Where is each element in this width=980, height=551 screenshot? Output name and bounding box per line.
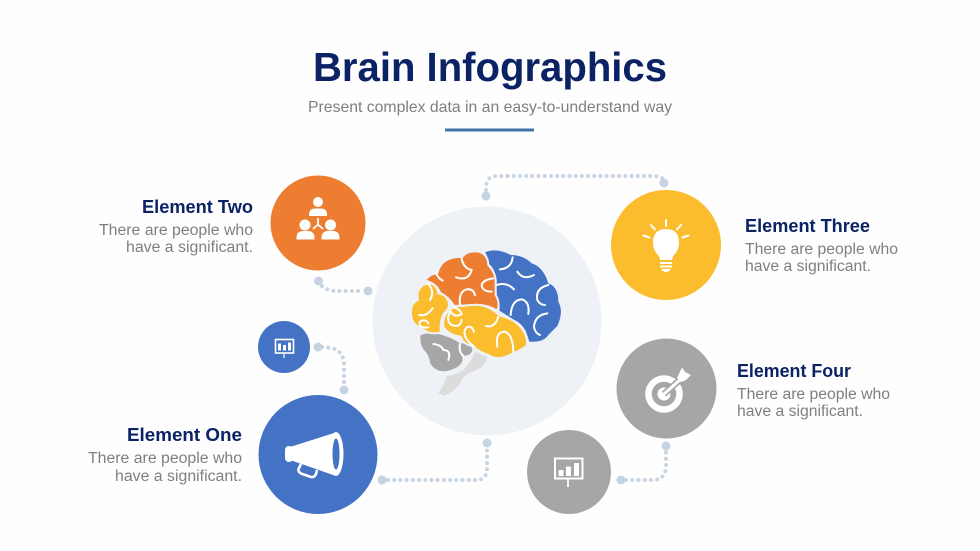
Element One text: There are people who <box>88 450 242 467</box>
Element Two text: There are people who <box>99 222 253 239</box>
Element Four text: have a significant. <box>737 403 863 420</box>
Element Two text <box>99 196 253 256</box>
icon: megaphone <box>285 432 344 477</box>
Element Four circle <box>616 338 716 438</box>
small blue circle <box>258 321 310 373</box>
connector: top centre to Element Three <box>482 176 668 200</box>
icon: target with dart <box>648 368 691 410</box>
connector: Element Two to centre <box>314 276 372 296</box>
Element Three text <box>745 215 898 275</box>
brain stem <box>438 352 487 396</box>
brain lobe: grey <box>419 332 473 372</box>
Element Two text: Element Two <box>142 196 253 217</box>
icon: presentation board <box>555 458 582 487</box>
connector: small blue icon to Element One <box>314 342 348 394</box>
Element Four text: There are people who <box>737 386 890 403</box>
brain lobe: orange <box>425 251 499 311</box>
Element Four text: Element Four <box>737 360 851 381</box>
icon: people network <box>296 197 340 240</box>
Element One text: Element One <box>127 424 242 445</box>
Element Four text <box>737 360 890 420</box>
Element One text: have a significant. <box>115 468 242 485</box>
title: Brain Infographics <box>313 44 667 90</box>
brain lobe: yellow right <box>443 305 527 358</box>
Element Two circle <box>270 176 366 270</box>
title underline <box>445 128 534 132</box>
connector: small grey icon to Element Four <box>616 442 670 484</box>
Element One circle <box>258 395 378 514</box>
icon: brain <box>411 250 561 396</box>
icon: light bulb <box>644 220 688 272</box>
Element Three circle <box>611 190 721 300</box>
central circle <box>372 206 602 436</box>
small grey circle <box>527 430 611 514</box>
brain folds <box>419 257 548 360</box>
Element Three text: Element Three <box>745 215 870 236</box>
Element Two text: have a significant. <box>126 239 253 256</box>
Element Three text: There are people who <box>745 241 898 258</box>
Element One text <box>88 424 242 485</box>
brain lobe: blue <box>485 250 561 342</box>
connector: Element One to centre <box>378 438 492 484</box>
Element Three text: have a significant. <box>745 258 871 275</box>
subtitle: Present complex data in an easy-to-understand way <box>308 99 672 116</box>
icon: presentation board <box>276 340 294 358</box>
brain lobe: yellow left <box>411 283 449 333</box>
